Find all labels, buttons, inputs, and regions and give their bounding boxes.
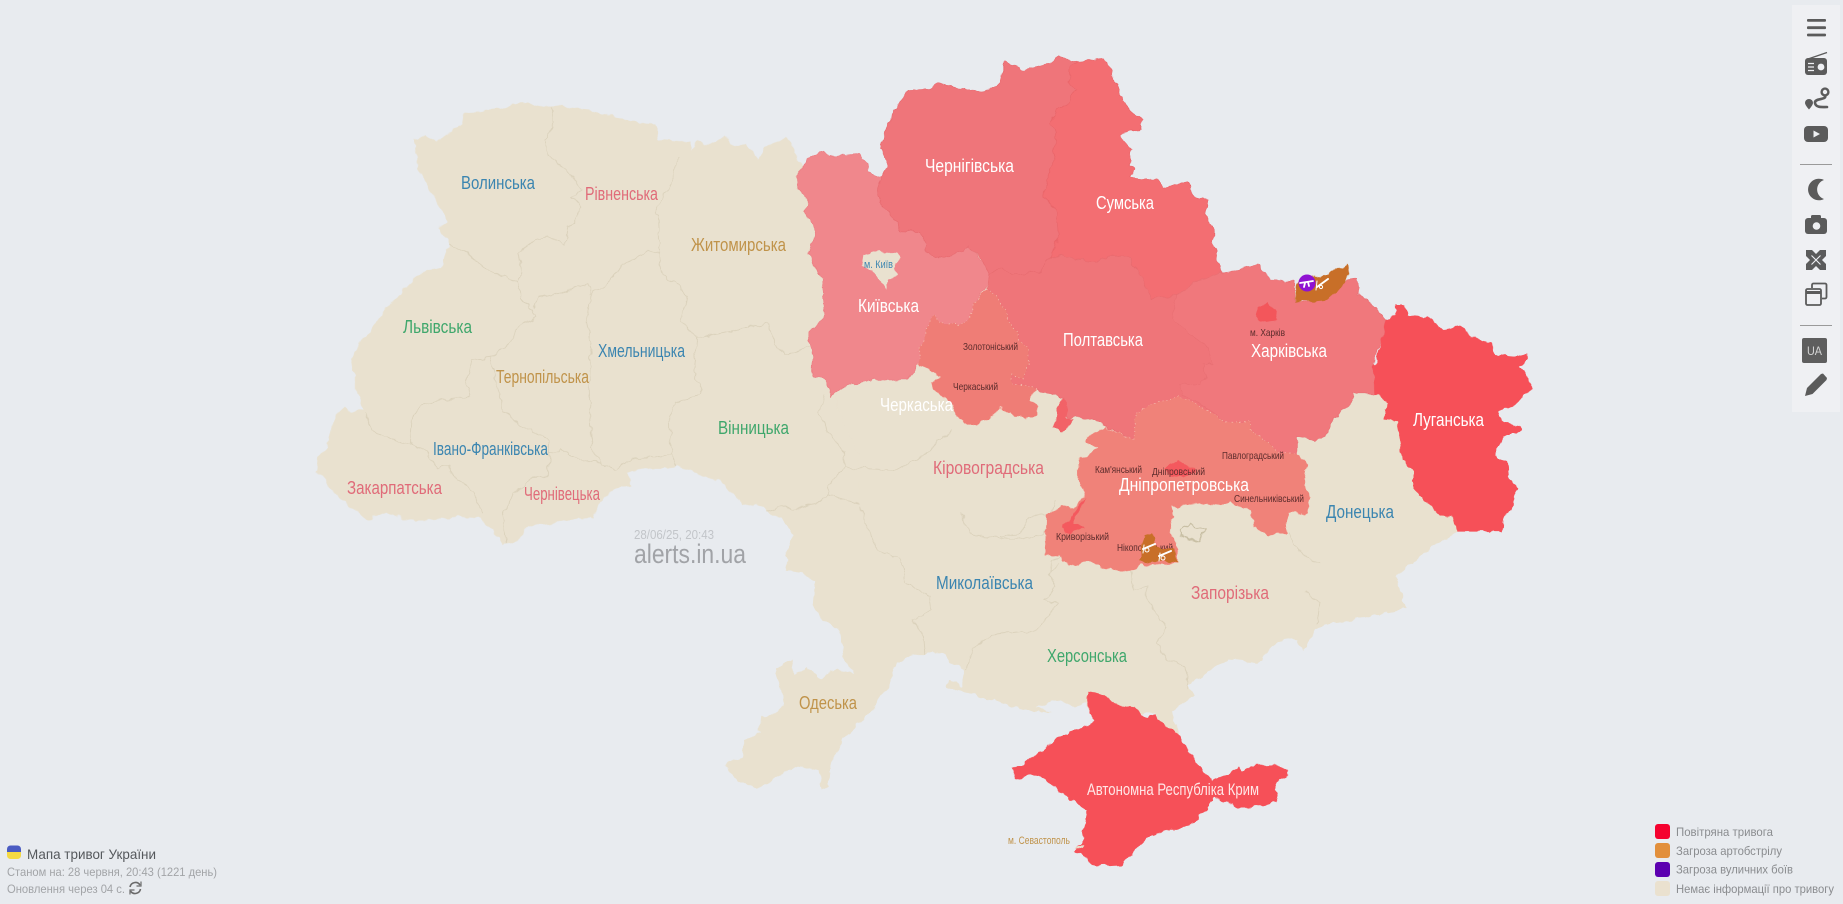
region: Kremenchuk-side alert fragment — [1052, 398, 1073, 433]
icon: language badge UA — [1802, 338, 1827, 363]
panel: map info — [7, 846, 217, 896]
label: Запорізька: Запорізька — [1191, 583, 1270, 603]
region: Kharkiv oblast — [1173, 265, 1386, 453]
title: Мапа тривог України — [27, 846, 156, 862]
map base: oblasts with no alert information — [316, 103, 1463, 790]
label: Нікопольський raion (sits beneath the artillery zone): Нікопольський — [1117, 542, 1173, 554]
label: Чернігівська: Чернігівська — [925, 156, 1015, 176]
label: Кіровоградська: Кіровоградська — [933, 458, 1045, 478]
label: Дніпропетровська: Дніпропетровська — [1119, 475, 1250, 495]
icon: menu — [1807, 19, 1826, 36]
label: Тернопільська: Тернопільська — [496, 367, 590, 387]
legend — [1655, 824, 1834, 896]
region: Sumy oblast — [1043, 58, 1227, 307]
region: artillery threat, Nikopol — [1140, 533, 1178, 563]
legend item: air alert: Повітряна тривога — [1676, 825, 1773, 839]
legend item: no information: Немає інформації про тривогу — [1676, 882, 1834, 896]
label: м. Севастополь: м. Севастополь — [1008, 835, 1070, 847]
region: Cherkasy raions under alert — [918, 288, 1038, 425]
label: Хмельницька: Хмельницька — [598, 341, 686, 361]
region: Kharkiv city alert — [1256, 301, 1279, 323]
label: Донецька: Донецька — [1326, 502, 1395, 522]
icon: camera — [1805, 215, 1827, 234]
icon: dark mode moon — [1808, 179, 1824, 200]
icon: refresh — [130, 882, 141, 894]
region: Kyiv oblast — [796, 152, 990, 397]
region: Crimea — [1012, 692, 1289, 867]
status date: Станом на: 28 червня, 20:43 (1221 день) — [7, 865, 217, 879]
label: Черкаський: Черкаський — [953, 381, 998, 393]
icon: windows — [1806, 284, 1826, 305]
artillery threat zones — [1140, 264, 1350, 563]
label: Синельниківський: Синельниківський — [1234, 493, 1304, 505]
label: Харківська: Харківська — [1251, 341, 1328, 361]
label: Сумська: Сумська — [1096, 193, 1155, 213]
label: Житомирська: Житомирська — [691, 235, 787, 255]
region: Luhansk oblast — [1373, 305, 1532, 532]
region: Sevastopol city — [1074, 845, 1086, 850]
icon: artillery gun, north Kharkiv — [1316, 279, 1328, 290]
oblast borders: centre — [844, 430, 953, 470]
icon: fullscreen — [1806, 250, 1826, 270]
icon: pencil — [1805, 374, 1827, 396]
label: Павлоградський: Павлоградський — [1222, 450, 1284, 462]
watermark: timestamp: 28/06/25, 20:43 — [634, 527, 714, 542]
label: Рівненська: Рівненська — [585, 184, 659, 204]
label: Чернівецька: Чернівецька — [524, 484, 601, 504]
icon: route — [1805, 89, 1828, 110]
legend item: artillery threat: Загроза артобстрілу — [1676, 844, 1782, 858]
label: Закарпатська: Закарпатська — [347, 478, 443, 498]
region: Chernihiv oblast — [877, 57, 1080, 275]
icon: artillery gun, Nikopol 2 — [1159, 551, 1171, 561]
label: м. Харків: м. Харків — [1250, 327, 1285, 339]
label: Миколаївська: Миколаївська — [936, 573, 1034, 593]
region: Zaporizhzhia city outline — [1180, 522, 1206, 542]
label: Золотоніський: Золотоніський — [963, 341, 1018, 353]
label: Волинська: Волинська — [461, 173, 536, 193]
oblast borders: south — [860, 500, 1320, 690]
icon: video — [1804, 126, 1828, 142]
icon: Ukrainian flag — [7, 846, 21, 859]
label: Херсонська: Херсонська — [1047, 646, 1128, 666]
label: Львівська: Львівська — [403, 317, 473, 337]
label: Київська: Київська — [858, 296, 920, 316]
region: Kyiv city — [862, 250, 899, 290]
region: Kryvyi Rih city alert — [1062, 498, 1085, 533]
oblast borders: west — [364, 107, 860, 543]
region: Dnipropetrovsk oblast raions under alert — [1045, 301, 1311, 572]
update countdown: Оновлення через 04 с. — [7, 882, 125, 896]
region: Dnipro city alert — [1166, 460, 1195, 478]
icon: street fighting marker — [1298, 274, 1316, 292]
icon: radio — [1805, 52, 1827, 75]
label: Вінницька: Вінницька — [718, 418, 790, 438]
legend item: street fighting: Загроза вуличних боїв — [1676, 862, 1793, 876]
icon: language badge UA: UA — [1807, 344, 1822, 358]
label: Івано-Франківська: Івано-Франківська — [433, 439, 549, 459]
label: Дніпровський: Дніпровський — [1152, 466, 1205, 478]
region: Poltava oblast — [987, 255, 1220, 440]
oblast borders: Kirovohrad and Dnipro edge — [1000, 515, 1059, 580]
label: Одеська: Одеська — [799, 693, 858, 713]
label: Криворізький: Криворізький — [1056, 531, 1109, 543]
region: artillery threat, north Kharkiv — [1295, 264, 1350, 302]
label: м. Київ: м. Київ — [864, 259, 893, 271]
label: Полтавська: Полтавська — [1063, 330, 1144, 350]
panel: toolbar — [1792, 5, 1840, 412]
label: Кам'янський: Кам'янський — [1095, 464, 1142, 476]
icon: artillery gun, Nikopol 1 — [1143, 544, 1155, 553]
watermark: site name: alerts.in.ua — [634, 539, 747, 569]
label: Автономна Республіка Крим: Автономна Республіка Крим — [1087, 780, 1259, 799]
label: Луганська: Луганська — [1413, 410, 1485, 430]
map of Ukraine — [316, 57, 1532, 867]
label: Черкаська: Черкаська — [880, 395, 954, 415]
